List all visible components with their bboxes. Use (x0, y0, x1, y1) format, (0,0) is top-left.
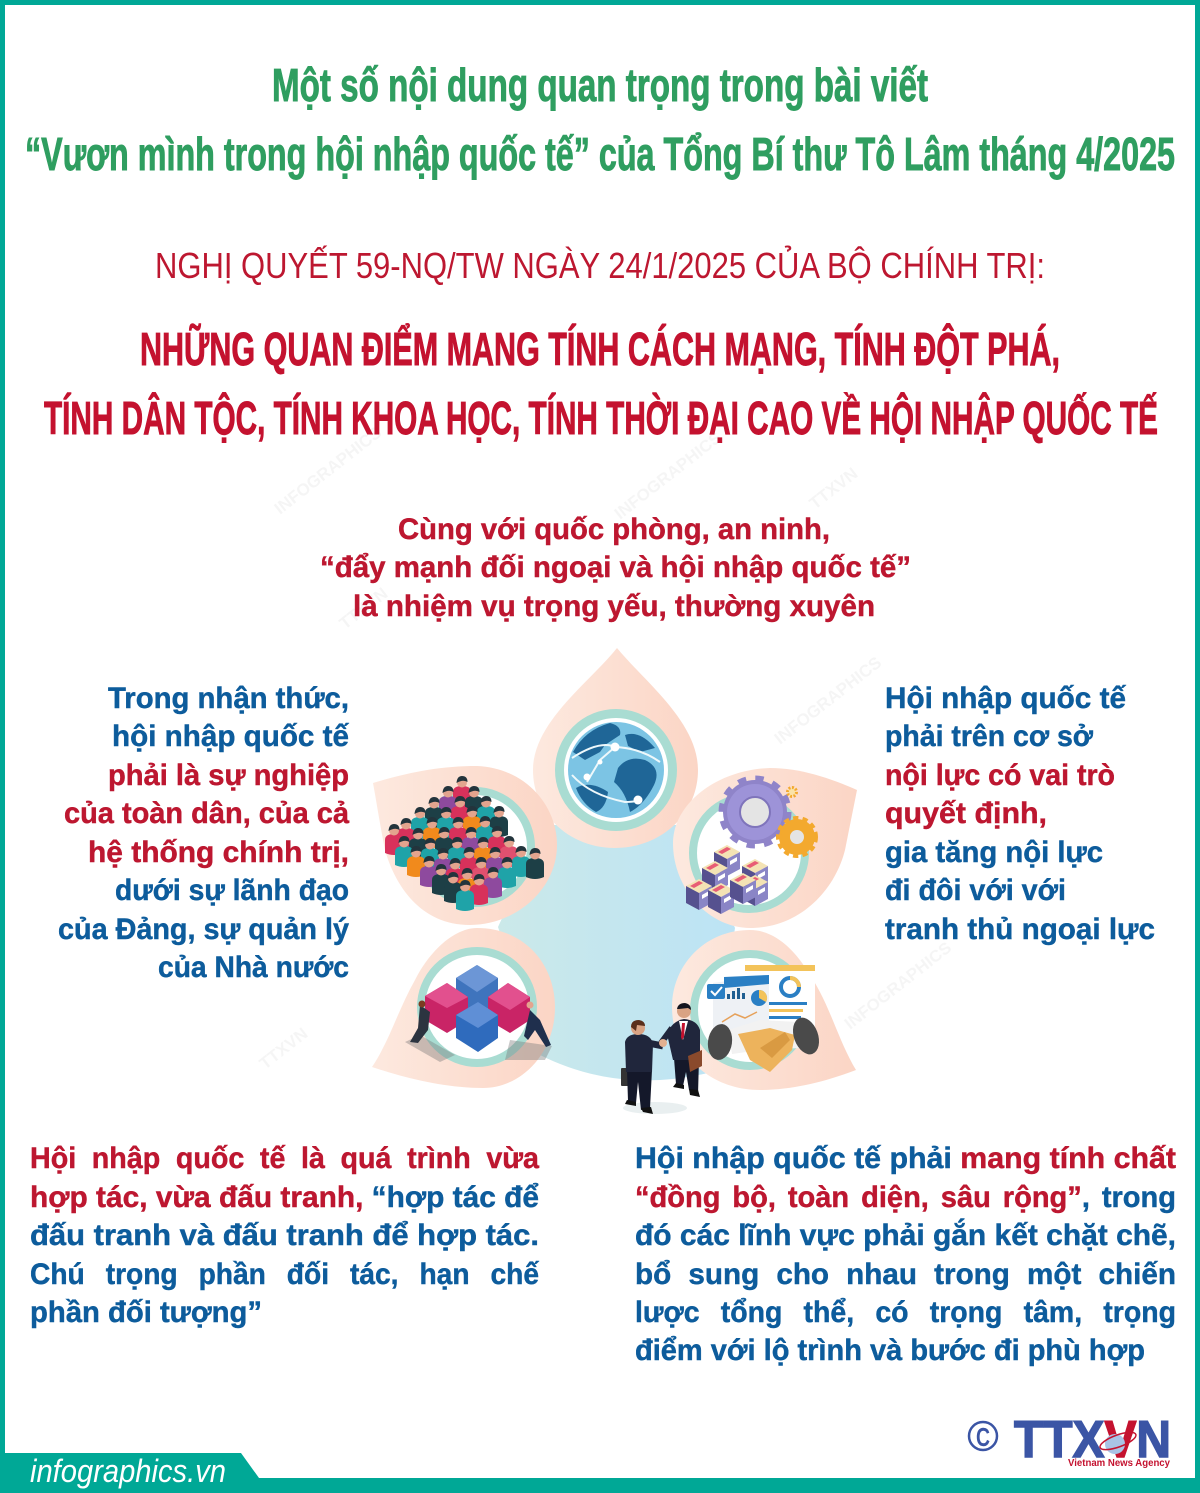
watermarks (256, 423, 955, 1073)
logo: TTXVN: Vietnam News Agency (1068, 1458, 1170, 1469)
text: right point: nội lực có vai trò (885, 759, 1115, 792)
icon: globe (560, 714, 672, 826)
icon: puzzle cubes (405, 951, 552, 1063)
central lotus graphic (372, 648, 857, 1114)
watermarks: INFOGRAPHICS (841, 938, 955, 1033)
text: right point: quyết định, (885, 797, 1047, 830)
text: bottom left point: phần đối tượng” (30, 1296, 262, 1329)
text: top point: “đẩy mạnh đối ngoại và hội nhập quốc tế” (320, 551, 911, 584)
text: left point: Trong nhận thức, (108, 682, 349, 715)
text: bottom left point: Hội nhập quốc tế là quá trình vừa (30, 1142, 539, 1175)
petal: upper left (373, 766, 557, 925)
text: bottom right point: đó các lĩnh vực phải gắn kết chặt chẽ, (635, 1218, 1176, 1252)
text: right point: tranh thủ ngoại lực (885, 913, 1155, 946)
text: top point: Cùng với quốc phòng, an ninh, (398, 513, 830, 546)
text: bottom left point: hợp tác, vừa đấu tranh, “hợp tác để (30, 1181, 539, 1214)
logo: TTXVN: C (976, 1422, 990, 1452)
text: left point: của Nhà nước (158, 951, 349, 984)
petal: upper right (673, 768, 857, 928)
illustration: two businessmen shaking hands (621, 1003, 702, 1114)
text: right point: gia tăng nội lực (885, 836, 1103, 869)
text: bottom left point: Chú trọng phần đối tác, hạn chế (30, 1258, 539, 1291)
watermarks: INFOGRAPHICS (611, 428, 725, 523)
text: bottom left point (30, 1142, 539, 1329)
petal: lower right (672, 930, 856, 1090)
text: bottom right point: lược tổng thể, có trọng tâm, trọng (635, 1296, 1176, 1329)
watermarks: INFOGRAPHICS (771, 653, 885, 748)
text: left point: hệ thống chính trị, (88, 836, 349, 869)
icon: crowd (385, 776, 544, 911)
text: left point: của Đảng, sự quản lý (58, 913, 349, 946)
main heading (44, 323, 1158, 444)
text: left point: dưới sự lãnh đạo (115, 874, 349, 907)
text: right point (885, 682, 1155, 946)
text: bottom right point: bổ sung cho nhau trong một chiến (635, 1258, 1176, 1291)
text: bottom right point (635, 1142, 1176, 1367)
text: top point: là nhiệm vụ trọng yếu, thường xuyên (353, 590, 875, 623)
text: left point: hội nhập quốc tế (112, 720, 349, 753)
text: bottom left point: đấu tranh và đấu tranh để hợp tác. (30, 1219, 539, 1252)
logo: TTXVN: TTXVN (1014, 1411, 1171, 1469)
text: top point (320, 513, 911, 623)
text: right point: Hội nhập quốc tế (885, 682, 1126, 715)
petal: lower left (372, 928, 555, 1088)
text: left point: phải là sự nghiệp (108, 759, 349, 792)
title (25, 59, 1175, 180)
text: left point (58, 682, 349, 984)
text: right point: phải trên cơ sở (885, 720, 1094, 753)
watermarks: TTXVN (336, 584, 391, 633)
subtitle: NGHỊ QUYẾT 59-NQ/TW NGÀY 24/1/2025 CỦA BỘ CHÍNH TRỊ: (155, 244, 1045, 286)
watermarks: TTXVN (806, 464, 861, 513)
petal: top (533, 648, 698, 848)
text: right point: đi đôi với với (885, 874, 1066, 907)
centre blue shape (498, 825, 735, 1080)
text: bottom right point: “đồng bộ, toàn diện, sâu rộng”, trong (635, 1181, 1176, 1214)
text: bottom right point: điểm với lộ trình và bước đi phù hợp (635, 1334, 1145, 1367)
text: left point: của toàn dân, của cả (64, 797, 349, 830)
text: bottom right point: Hội nhập quốc tế phải mang tính chất (635, 1142, 1176, 1175)
watermarks: TTXVN (256, 1024, 311, 1073)
footer site name: infographics.vn (30, 1453, 226, 1489)
title: Một số nội dung quan trọng trong bài viết (272, 59, 928, 111)
footer bar (0, 1453, 1200, 1493)
icon: charts and handshake (694, 954, 824, 1072)
icon: gears and file boxes (686, 780, 815, 914)
watermarks: INFOGRAPHICS (271, 423, 385, 518)
